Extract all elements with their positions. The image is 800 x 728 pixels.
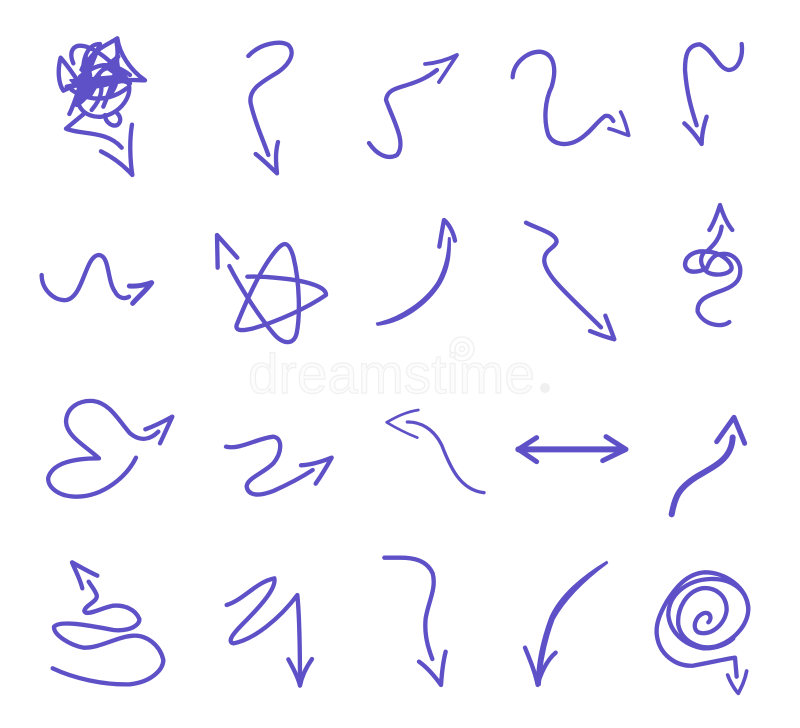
arrow 1: scribble with down arrow <box>59 38 145 175</box>
arrow 2: question-mark curve <box>248 43 292 173</box>
arrow 5: hook curving down <box>684 44 742 144</box>
arrow 4: wave to the right <box>513 52 629 144</box>
arrow 12: squiggle rising right <box>226 437 332 495</box>
arrow 14: double-headed horizontal arrow <box>518 437 626 462</box>
watermark: dreamstime <box>248 342 535 405</box>
arrow 9: zigzag down-right <box>526 223 614 339</box>
arrow 3: S-curve rising right <box>369 55 457 157</box>
arrow 11: heart-like loop <box>48 401 172 497</box>
arrow 7: star loop pointing up-left <box>217 235 326 342</box>
arrow 15: bold curve up-right <box>672 417 745 514</box>
arrow 20: spiral with down arrow <box>657 572 748 693</box>
arrow 6: bump to the right <box>42 255 152 303</box>
arrow 8: sweeping curve upward <box>377 220 455 325</box>
arrow 16: winding path up-left <box>53 562 163 684</box>
arrow 13: thin curve pointing up-left <box>387 410 484 493</box>
arrow 18: hook down <box>384 558 446 685</box>
arrow 17: zigzag then straight down <box>227 578 312 686</box>
arrow 19: tapered curve down-left <box>525 562 607 685</box>
arrow 10: knot rising upward <box>685 205 740 325</box>
